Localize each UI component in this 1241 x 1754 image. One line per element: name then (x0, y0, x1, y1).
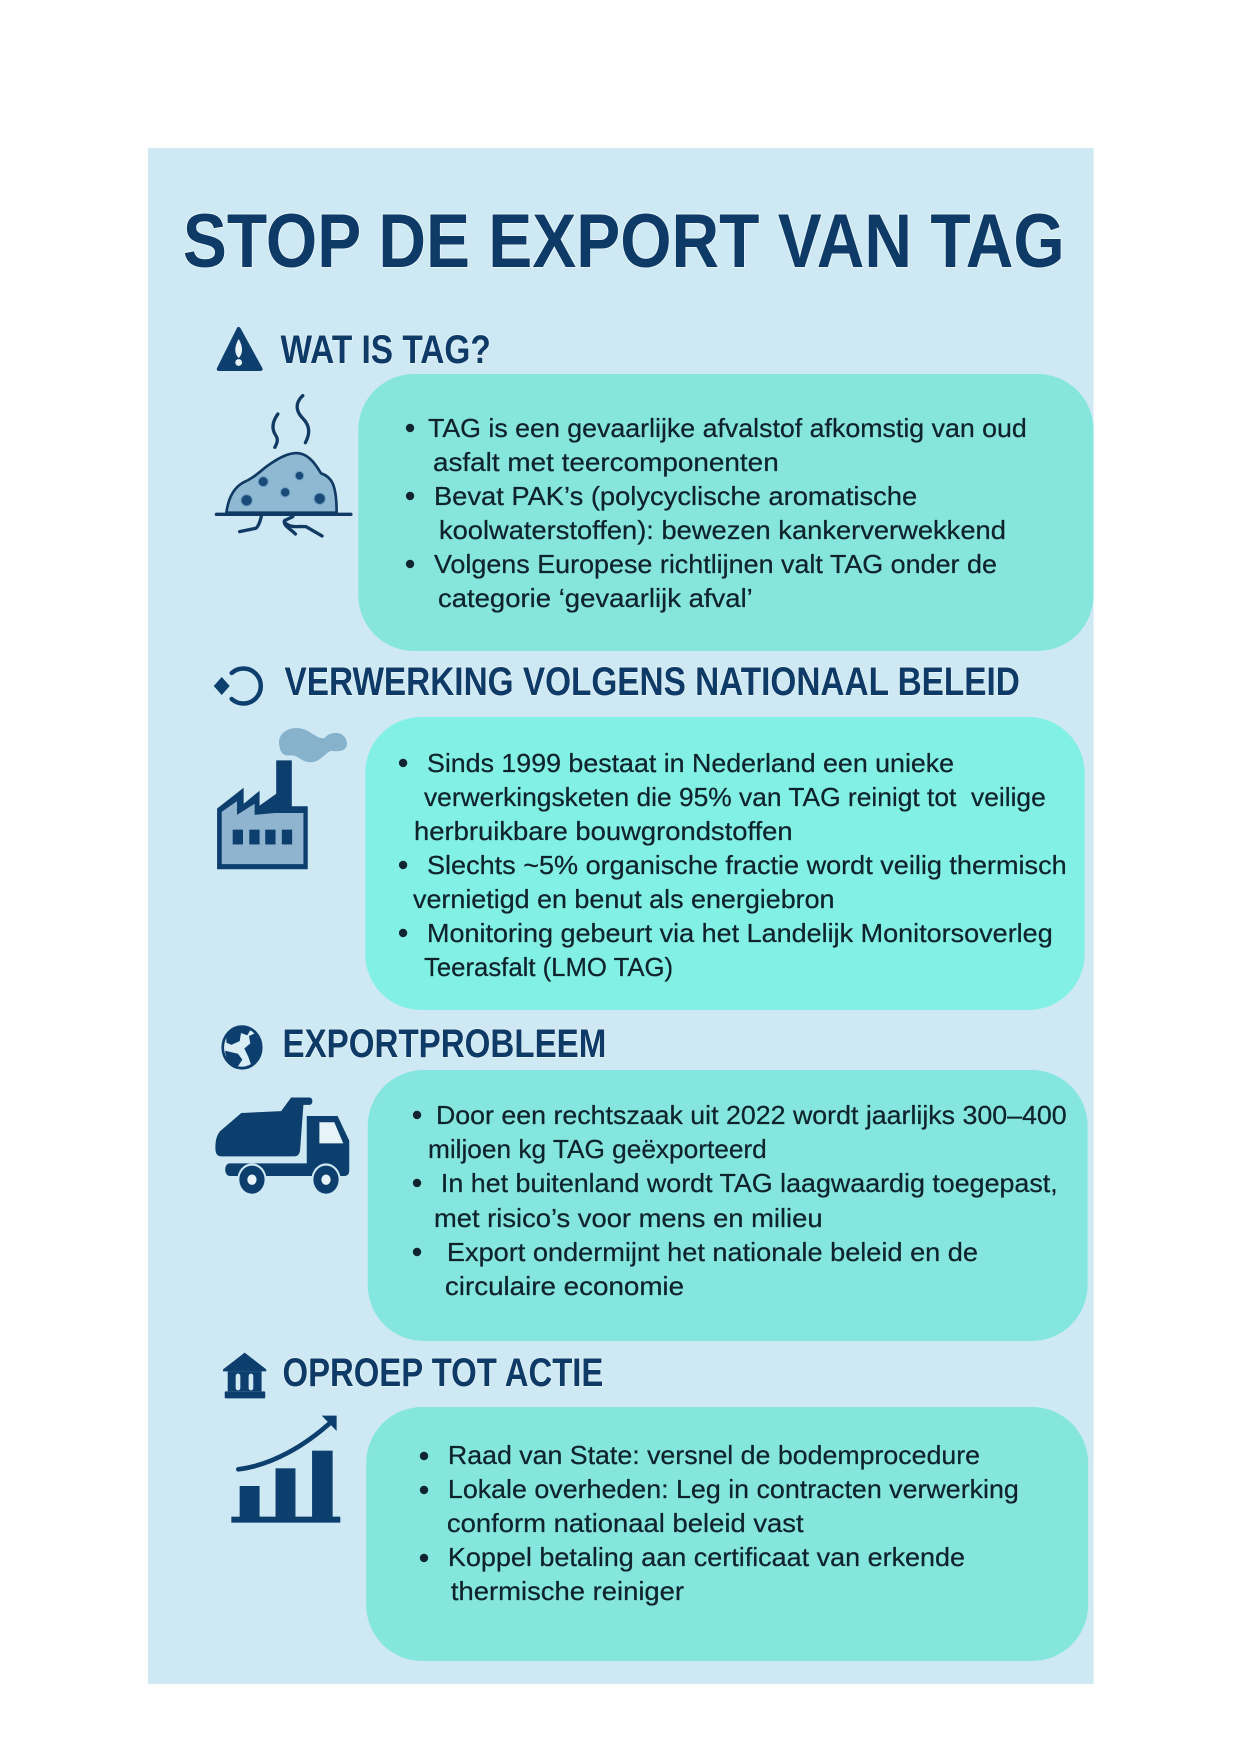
icon: cycle arrow with diamond (214, 668, 261, 703)
card: Verwerking (365, 717, 1085, 1010)
card: Wat is TAG: Volgens Europese richtlijnen valt TAG onder de (434, 551, 997, 579)
card: Verwerking: Teerasfalt (LMO TAG) (424, 954, 673, 982)
background panel (148, 148, 1094, 1684)
icon: dump truck (215, 1097, 349, 1196)
card: Verwerking: verwerkingsketen die 95% van TAG reinigt tot veilige (424, 784, 1046, 812)
section: Exportprobleem (215, 1022, 1088, 1341)
icon: warning triangle (219, 329, 261, 369)
card: Exportprobleem (368, 1070, 1088, 1341)
card: Verwerking: herbruikbare bouwgrondstoffen (414, 818, 793, 846)
icon: rising bar chart with arrow (231, 1416, 340, 1523)
icon: globe (223, 1027, 262, 1068)
card: Oproep tot actie: Koppel betaling aan certificaat van erkende (448, 1544, 965, 1572)
card: Oproep tot actie: Raad van State: versnel de bodemprocedure (448, 1442, 980, 1470)
heading: Wat is TAG: WAT IS TAG? (281, 328, 491, 372)
card: Verwerking: vernietigd en benut als energiebron (413, 886, 835, 914)
card: Wat is TAG: TAG is een gevaarlijke afvalstof afkomstig van oud (428, 415, 1027, 443)
card: Wat is TAG (358, 374, 1094, 651)
section: Oproep tot actie (223, 1351, 1088, 1661)
card: Oproep tot actie: conform nationaal beleid vast (447, 1510, 804, 1538)
card: Wat is TAG: asfalt met teercomponenten (433, 449, 779, 477)
card: Oproep tot actie: Lokale overheden: Leg in contracten verwerking (448, 1476, 1019, 1504)
card: Exportprobleem: circulaire economie (445, 1273, 684, 1301)
card: Exportprobleem: met risico’s voor mens en milieu (434, 1205, 823, 1233)
heading: Exportprobleem: EXPORTPROBLEEM (283, 1022, 606, 1066)
card: Wat is TAG: koolwaterstoffen): bewezen kankerverwekkend (439, 517, 1006, 545)
section: Wat is TAG (216, 328, 1094, 651)
card: Oproep tot actie (366, 1407, 1088, 1661)
heading: Oproep tot actie: OPROEP TOT ACTIE (283, 1351, 603, 1395)
card: Exportprobleem: miljoen kg TAG geëxporteerd (428, 1136, 767, 1164)
card: Wat is TAG: categorie ‘gevaarlijk afval’ (438, 585, 753, 613)
section: Verwerking (214, 660, 1085, 1010)
card: Exportprobleem: Export ondermijnt het nationale beleid en de (447, 1239, 978, 1267)
card: Exportprobleem: Door een rechtszaak uit 2022 wordt jaarlijks 300–400 (436, 1102, 1067, 1130)
infographic content (148, 148, 1094, 1684)
card: Verwerking: Sinds 1999 bestaat in Nederland een unieke (427, 750, 954, 778)
heading: Verwerking: VERWERKING VOLGENS NATIONAAL BELEID (285, 660, 1020, 704)
card: Wat is TAG: Bevat PAK’s (polycyclische aromatische (434, 483, 917, 511)
title: STOP DE EXPORT VAN TAG (183, 199, 1065, 284)
card: Verwerking: Slechts ~5% organische fractie wordt veilig thermisch (427, 852, 1067, 880)
icon: government building (223, 1353, 266, 1398)
icon: asphalt heap with steam (216, 396, 351, 536)
icon: factory with smoke (217, 728, 347, 869)
card: Exportprobleem: In het buitenland wordt TAG laagwaardig toegepast, (441, 1170, 1058, 1198)
card: Oproep tot actie: thermische reiniger (451, 1578, 684, 1606)
card: Verwerking: Monitoring gebeurt via het Landelijk Monitorsoverleg (427, 920, 1053, 948)
